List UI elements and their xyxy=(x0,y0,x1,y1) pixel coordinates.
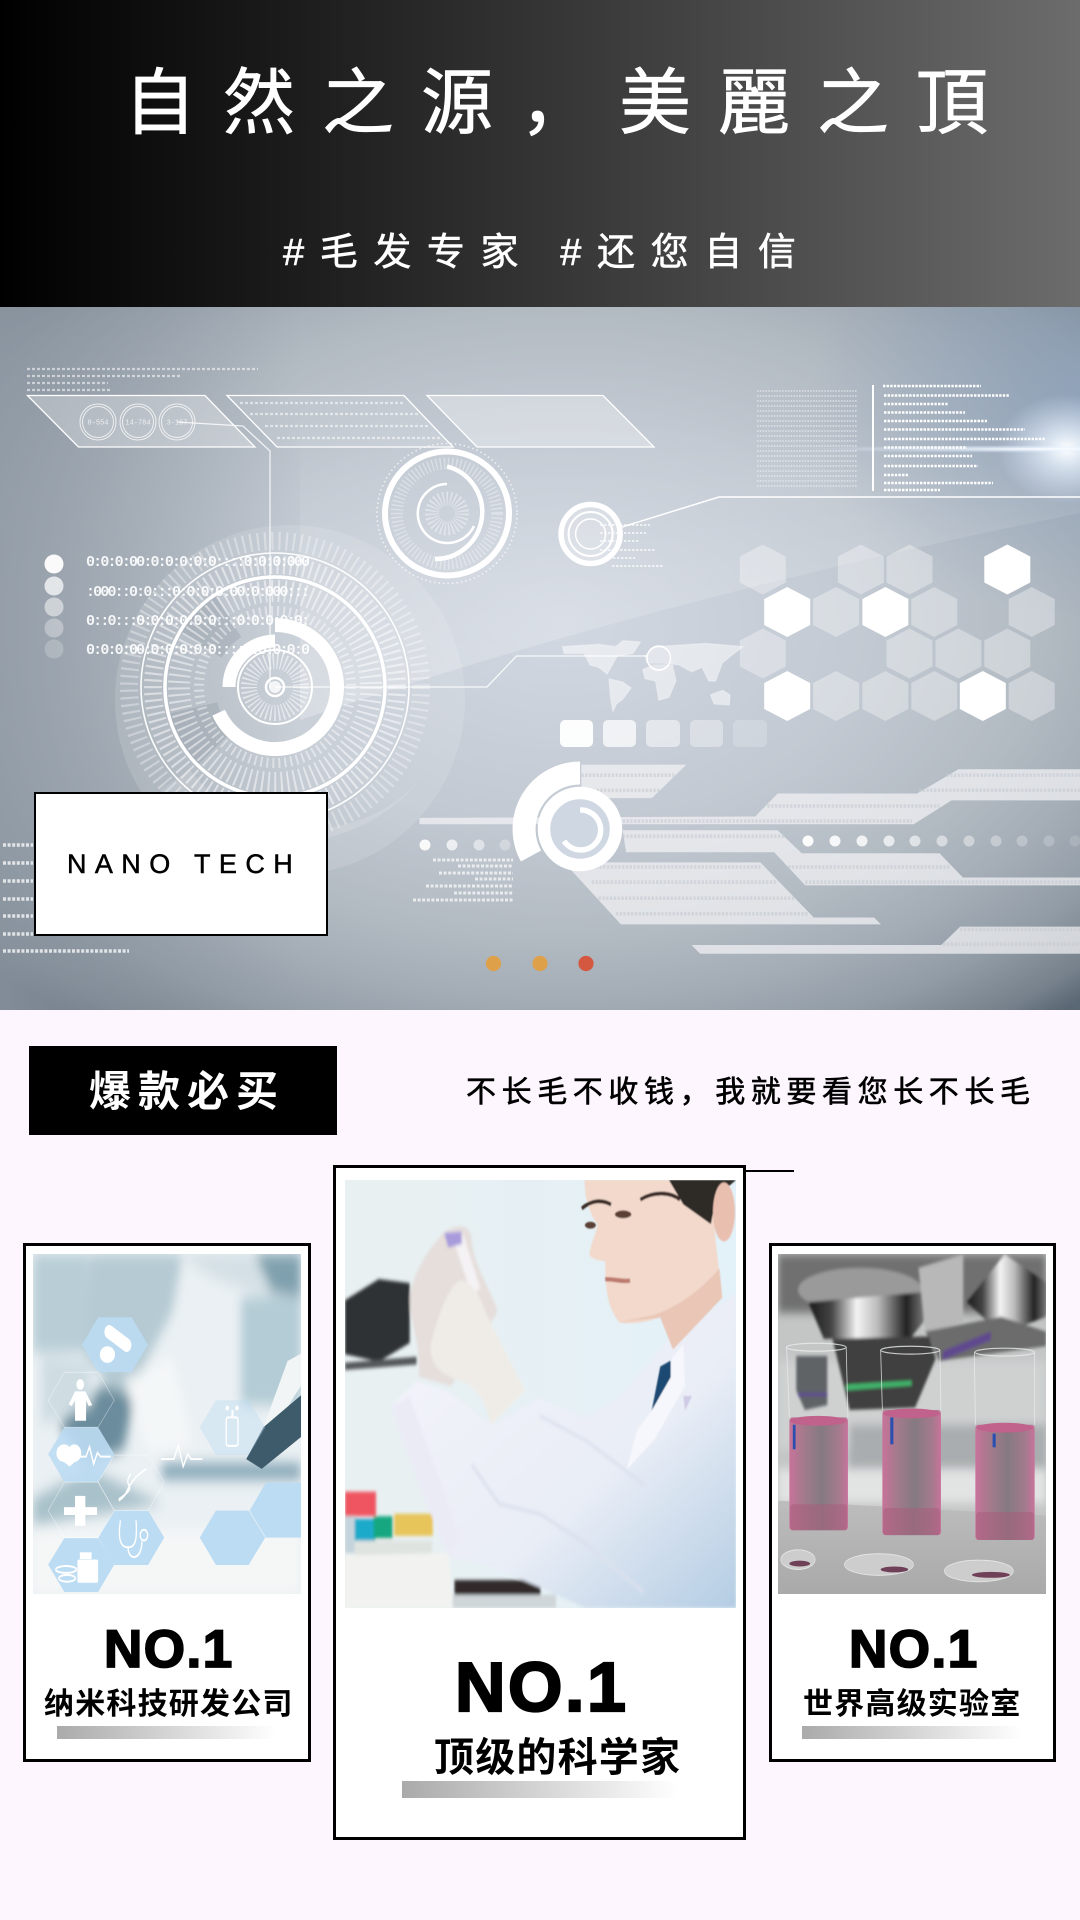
plate data rows xyxy=(27,369,442,438)
glass tubes with pink liquid xyxy=(786,1343,1035,1540)
binary rows: 0:0:0:00:0:0:0:0:0::::0:0:0:000 xyxy=(86,554,310,571)
gradient underline xyxy=(57,1726,277,1739)
binary rows xyxy=(86,554,310,659)
three small gauges xyxy=(80,404,195,440)
node data rows xyxy=(600,525,664,566)
dot row left xyxy=(420,840,510,850)
parallelogram data plates xyxy=(28,396,654,447)
rack holes xyxy=(781,1550,1013,1582)
microscope objectives xyxy=(796,1254,1046,1410)
status dots column xyxy=(44,554,64,658)
NANO TECH text: NANO TECH xyxy=(67,849,301,879)
gloved hands and sample tube xyxy=(410,1226,525,1425)
table surface xyxy=(778,1501,1046,1594)
slogan: 不长毛不收钱，我就要看您长不长毛 xyxy=(466,1076,1036,1109)
three small gauges: 14-784 xyxy=(125,420,151,428)
card: world-class laboratory xyxy=(769,1243,1056,1762)
medium radial dial xyxy=(377,444,517,584)
bright data list top right xyxy=(873,385,1046,491)
section tag text: 爆款必买 xyxy=(89,1068,285,1115)
header band xyxy=(0,0,1080,307)
three small gauges: 8-554 xyxy=(87,420,109,428)
panel: technology hero image xyxy=(0,307,1080,1010)
large radial dial xyxy=(115,525,465,875)
hexagon cluster xyxy=(740,544,1055,721)
circuit bands xyxy=(419,765,1080,954)
card caption: 顶级的科学家 xyxy=(434,1736,681,1780)
node connector line xyxy=(622,497,1080,527)
faint data block top right xyxy=(757,391,857,486)
world map xyxy=(562,641,743,712)
card caption: 世界高级实验室 xyxy=(803,1688,1021,1720)
card: top scientist xyxy=(333,1165,746,1840)
small circular node xyxy=(561,504,620,564)
circuit band data rows xyxy=(581,775,1080,944)
NANO TECH label box xyxy=(34,792,328,936)
photo: scientist xyxy=(345,1180,736,1608)
lens flare xyxy=(800,394,1080,504)
binary block centre xyxy=(413,860,513,900)
rounded status chips xyxy=(560,720,767,747)
subtitle hashtags: #毛发专家 #还您自信 xyxy=(283,232,811,274)
thin hexagon outlines xyxy=(48,1372,164,1538)
card caption: 纳米科技研发公司 xyxy=(44,1688,294,1720)
photo: lab hexagon icons xyxy=(33,1254,301,1594)
blue hexagons xyxy=(48,1317,301,1592)
NO.1 rank: NO.1 xyxy=(104,1620,234,1679)
binary block left xyxy=(3,845,129,951)
title: 自然之源，美麗之頂 xyxy=(124,64,1015,144)
dot row right xyxy=(802,836,1080,846)
connector line to world map xyxy=(275,656,647,687)
pagination dots xyxy=(486,956,594,971)
gradient underline xyxy=(402,1781,678,1798)
card: nano technology company xyxy=(23,1243,311,1762)
white medical icons xyxy=(56,1323,133,1583)
test tube xyxy=(246,1354,301,1469)
NO.1 rank: NO.1 xyxy=(849,1620,979,1679)
background gradient xyxy=(0,307,1080,1010)
gradient underline xyxy=(802,1726,1022,1739)
face and neck xyxy=(582,1180,736,1349)
section tag xyxy=(29,1046,337,1135)
photo: microscope and pink test tubes xyxy=(778,1254,1046,1594)
connector line from gauges xyxy=(177,422,270,687)
binary rows: :000::0:0:::0:0:0:0:00:0:000::: xyxy=(86,584,310,601)
tie and collar xyxy=(627,1344,692,1470)
central ring emblem xyxy=(524,773,616,865)
binary rows: 0:0:0:00:0:0:0:0:0::::0:0:0:0:0 xyxy=(86,642,310,659)
microscope xyxy=(345,1279,417,1370)
NO.1 rank: NO.1 xyxy=(455,1648,628,1726)
lab coat xyxy=(406,1384,736,1608)
accent line xyxy=(746,1170,794,1172)
binary rows: 0::0:::0:0:0:0:0:0:::0:0:0:0:0: xyxy=(86,613,310,630)
three small gauges: 3-157 xyxy=(166,420,188,428)
vials and rack xyxy=(345,1492,556,1608)
